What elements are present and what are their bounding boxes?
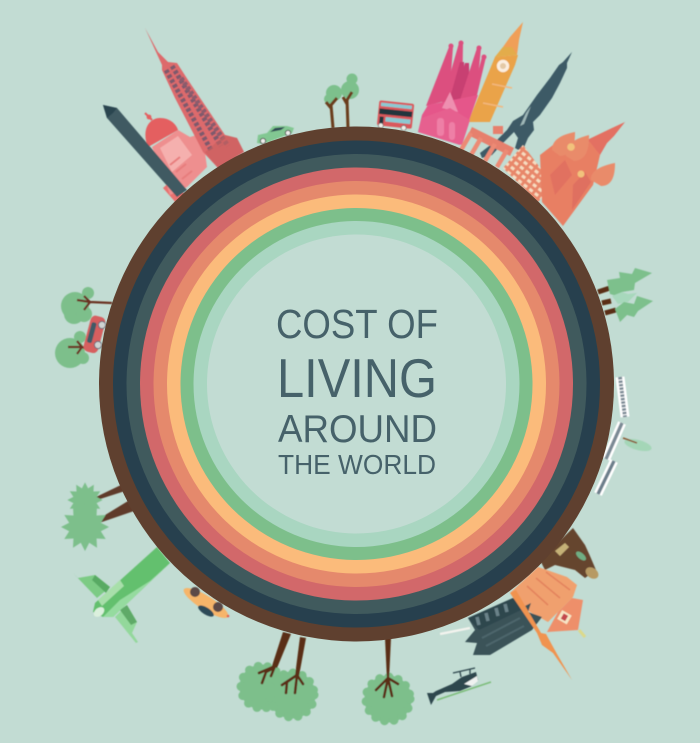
landmark: brown pagoda gate [540,528,601,581]
icon: green car [257,126,294,144]
icon: small right tree [623,437,653,453]
icon: white feather [440,628,470,634]
title [276,301,438,480]
landmark: orange tower [510,590,572,680]
landmark: eiffel tower [480,52,572,158]
icon: orange car [180,583,232,623]
landmark: sagrada familia [418,40,486,145]
landmark: orange temple [510,567,585,637]
icon: double-decker bus [377,100,414,131]
title: AROUND [278,408,437,451]
icon: helicopter [427,668,491,705]
landmark: dark castle [465,598,542,655]
icon: train [598,377,625,494]
concentric globe rings [99,126,614,642]
landmark: domed capitol [145,113,207,204]
icon: green airplane [73,547,170,643]
icon: right pine trees [598,268,653,322]
icon: left trees and red car [55,287,112,368]
icon: spiky left trees [61,482,134,551]
landmark: windowed building [503,145,553,202]
landmark: st basil's cathedral [540,122,625,226]
title: LIVING [277,347,437,409]
icon: bottom trees [241,632,410,721]
landmark: brandenburg gate [461,126,514,167]
landmark: big ben [468,22,523,122]
icon: top trees [324,74,359,128]
landmark: empire state building [145,28,244,168]
title: COST OF [276,301,438,347]
landmark: obelisk [103,105,187,197]
title: THE WORLD [278,449,436,480]
